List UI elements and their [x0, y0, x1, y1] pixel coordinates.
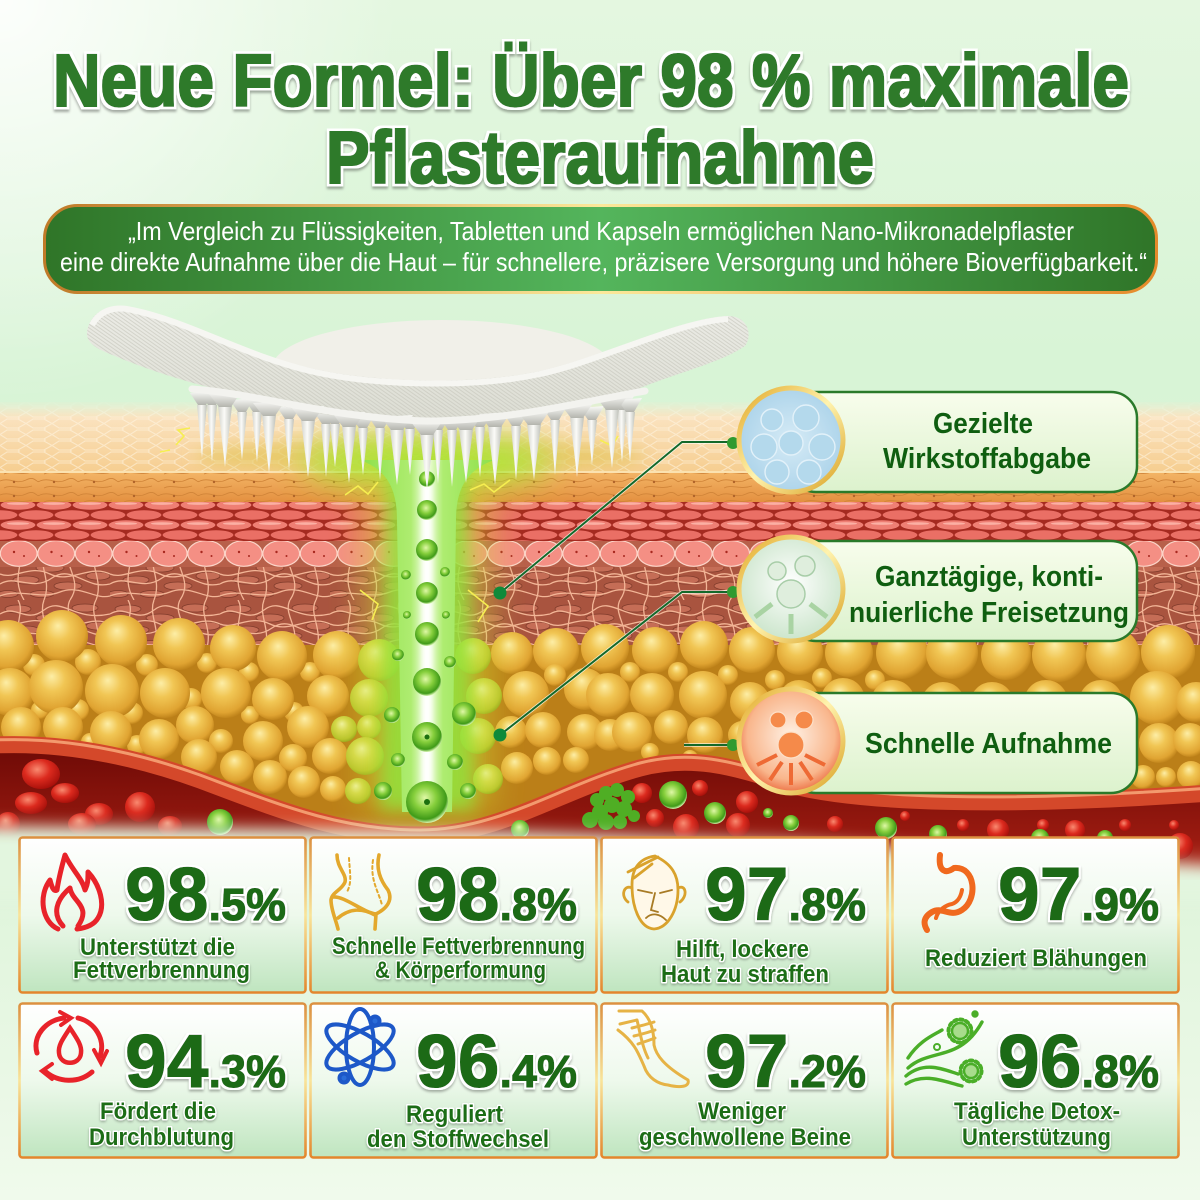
stat card: 97.8%: Haut zu straffen: [661, 961, 829, 988]
stat card: 97.8%: 97.8%: [705, 852, 866, 936]
stat card: 98.8%: Schnelle Fettverbrennung: [332, 933, 585, 960]
stat card: 98.5%: 98.5%: [125, 852, 286, 936]
stat card: 96.4%: 96.4%: [416, 1019, 577, 1103]
icon: face: [624, 856, 685, 929]
stat card: 97.2%: Weniger: [698, 1098, 786, 1125]
needle spikes: back row: [197, 405, 635, 487]
icon: blue cells: [739, 388, 843, 492]
surface glow under needles: [302, 436, 552, 488]
side bubbles: [374, 567, 476, 800]
title: Pflasteraufnahme: [326, 116, 874, 199]
needle funnels: back row: [190, 391, 642, 430]
microneedle patch: [87, 306, 749, 490]
stat card: 98.5%: [20, 838, 306, 992]
connector lines: [494, 437, 739, 751]
icon: absorption cells: [739, 689, 843, 793]
icon: body shape: [331, 855, 390, 929]
side glow around channel: [362, 490, 492, 810]
fibre layer: [0, 567, 1200, 657]
patch sheet: [87, 306, 749, 422]
white core: [422, 480, 432, 805]
yellow tint on skin below the patch: [195, 438, 645, 474]
lower fade: [0, 826, 1200, 900]
stat card: 94.3%: Durchblutung: [89, 1124, 234, 1151]
stat card: 97.8%: Hilft, lockere: [676, 936, 809, 963]
blood vessel: [0, 740, 1200, 880]
stat card: 94.3%: Fördert die: [100, 1098, 216, 1125]
stat card: 94.3%: [20, 1004, 306, 1158]
banner: intro quote: „Im Vergleich zu Flüssigkeiten, Tabletten und Kapseln ermöglichen Nano-Mikronadelpflaster: [128, 216, 1074, 246]
fat spheres: [0, 610, 1200, 804]
green particle cluster: [582, 783, 640, 830]
callout: Ganztägige, kontinuierliche Freisetzung: [739, 537, 1137, 641]
vertical drug bubbles: [406, 471, 448, 823]
stat card: 97.9%: Reduziert Blähungen: [925, 945, 1147, 972]
icon: leg: [618, 1011, 688, 1087]
skin surface: [0, 402, 1200, 474]
icon: release cells: [739, 537, 843, 641]
red blood cells: [0, 759, 1193, 859]
icon: atom: [320, 1009, 400, 1085]
icon: flame: [43, 855, 102, 929]
round pink cell row: [0, 541, 1200, 568]
stat card: 97.2%: geschwollene Beine: [639, 1124, 851, 1151]
stat card: 96.8%: 96.8%: [998, 1019, 1159, 1103]
stat card: 97.2%: [602, 1004, 888, 1158]
skin cross-section: [0, 402, 1200, 900]
stat card: 96.8%: Unterstützung: [962, 1124, 1111, 1151]
channel glow: [380, 470, 474, 810]
fat layer base: [0, 645, 1200, 840]
stat card: 98.8%: & Körperformung: [375, 957, 546, 984]
stat card: 96.4%: Reguliert: [406, 1101, 503, 1128]
stat card: 96.4%: den Stoffwechsel: [367, 1126, 549, 1153]
stat card: 96.8%: Tägliche Detox-: [954, 1098, 1120, 1125]
needle funnels: front row: [209, 392, 628, 435]
icon: stomach: [925, 855, 972, 930]
spark lines: [160, 428, 618, 622]
red cell layer: [0, 502, 1200, 541]
stat card: 94.3%: 94.3%: [125, 1019, 286, 1103]
callout: Gezielte Wirkstoffabgabe: Gezielte: [933, 408, 1033, 440]
callout: Ganztägige, kontinuierliche Freisetzung: Ganztägige, konti-: [875, 561, 1103, 593]
callout: Gezielte Wirkstoffabgabe: [739, 388, 1137, 492]
stat card: 98.5%: Fettverbrennung: [73, 957, 250, 984]
callout: Schnelle Aufnahme: Schnelle Aufnahme: [865, 728, 1112, 760]
banner: intro quote: [44, 206, 1156, 292]
stat card: 97.2%: 97.2%: [705, 1019, 866, 1103]
stat card: 98.8%: [310, 838, 596, 992]
needle base plate: [192, 389, 645, 421]
stat card: 98.8%: 98.8%: [416, 852, 577, 936]
green channel: [160, 428, 618, 823]
title: [53, 39, 1129, 199]
callout: Gezielte Wirkstoffabgabe: Wirkstoffabgabe: [883, 443, 1091, 475]
stat card: 97.9%: 97.9%: [998, 852, 1159, 936]
patch dome: [272, 320, 612, 416]
stat card: 98.5%: Unterstützt die: [80, 934, 235, 961]
green bubbles in blood: [207, 781, 1113, 847]
epidermis band: [0, 471, 1200, 502]
callout: Schnelle Aufnahme: [739, 689, 1137, 793]
stat card: 97.8%: [602, 838, 888, 992]
stat card: 96.4%: [310, 1004, 596, 1158]
stat card: 96.8%: [892, 1004, 1178, 1158]
icon: blood circulation: [36, 1012, 107, 1080]
patch rim: [92, 309, 728, 384]
stat card: 97.9%: [892, 838, 1178, 992]
needle spikes: front row: [218, 406, 619, 490]
channel shape: [360, 460, 494, 812]
callout: Ganztägige, kontinuierliche Freisetzung: nuierliche Freisetzung: [849, 597, 1129, 629]
icon: detox: [906, 1012, 982, 1086]
